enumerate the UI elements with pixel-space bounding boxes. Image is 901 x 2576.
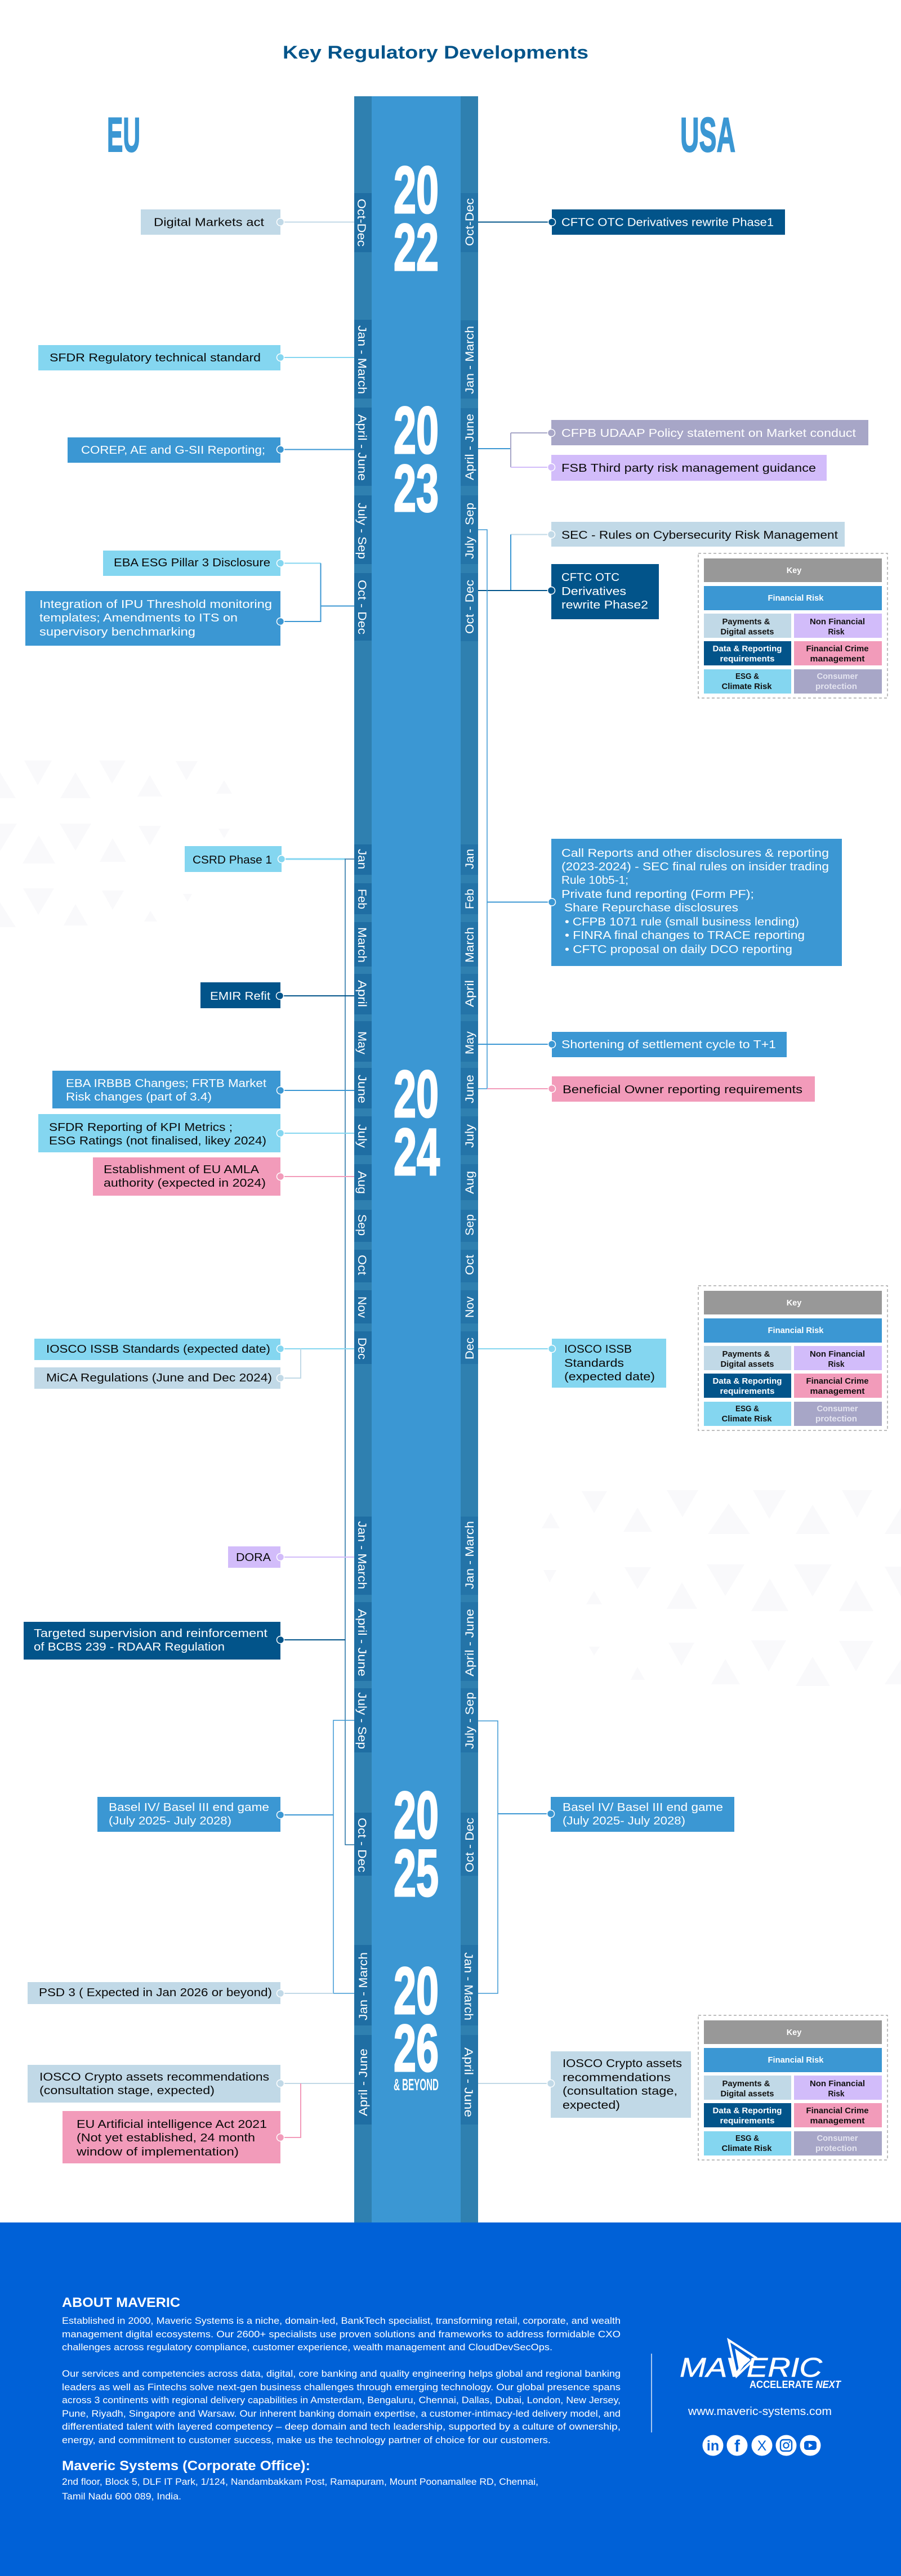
legend: key 2023: requirements [720,655,775,664]
legend: key 2026: Financial Crime [806,2107,868,2116]
legend: key 2024: Non Financial [810,1350,865,1359]
box: IOSCO Crypto assets right: IOSCO Crypto assets [563,2057,682,2070]
year 2023: 20 [394,393,439,468]
box: IOSCO ISSB Standards left [34,1339,280,1360]
box: Targeted supervision: of BCBS 239 - RDAAR Regulation [34,1640,225,1653]
legend: key 2024: Financial Risk [768,1326,824,1335]
box: Call Reports [551,839,842,966]
box: Beneficial Owner reporting [552,1076,815,1102]
box: Integration of IPU Threshold [25,591,280,646]
year 2026 and beyond: 26 [394,2011,439,2086]
box: EBA ESG Pillar 3 Disclosure: EBA ESG Pillar 3 Disclosure [114,556,270,569]
right month labels: Oct-Dec [463,198,476,246]
heading: corporate office: Maveric Systems (Corporate Office): [62,2458,310,2474]
left month labels: July - Sep [355,1692,368,1749]
box: Basel IV left: Basel IV/ Basel III end game [109,1801,269,1814]
box: Integration of IPU Threshold: templates; Amendments to ITS on [39,611,238,624]
box: Establishment of EU AMLA authority [93,1157,280,1196]
legend: key 2024: Financial Crime [806,1377,868,1386]
right month labels: April - June [463,414,476,480]
right month labels: Dec [463,1338,476,1359]
right month labels: June [463,1075,476,1103]
box: IOSCO Crypto assets right [551,2051,691,2118]
legend: key 2023: management [810,655,865,664]
legend: key 2026: Digital assets [721,2090,774,2099]
box: Establishment of EU AMLA authority: Establishment of EU AMLA [104,1163,259,1176]
icon: X [751,2435,773,2456]
right month labels: July - Sep [463,1692,476,1749]
right month labels: July - Sep [463,503,476,559]
text block: about paragraph 2: energy, and commitment to customer success, make us the technology partner of choice for our customers. [62,2435,551,2445]
icon: YouTube [800,2435,821,2456]
box: SEC Rules on Cybersecurity [551,522,845,547]
box: CSRD Phase 1: CSRD Phase 1 [193,853,272,866]
connector: AMLA [277,1173,354,1180]
text block: about paragraph 2: leaders as well as Fintechs solve next-gen business challenges through emerging technology. Our global presence spans [62,2382,621,2392]
legend: key 2024: ESG & [735,1405,759,1414]
year 2025: 25 [394,1836,439,1911]
year 2024: 24 [394,1115,440,1189]
left month labels: Oct - Dec [355,1818,368,1872]
title: Key Regulatory Developments [283,42,588,62]
box: Call Reports: • CFPB 1071 rule (small business lending) [565,915,799,928]
box: CFTC OTC Derivatives rewrite Phase2: Derivatives [561,585,626,598]
logo: Maveric: ACCELERATE NEXT [750,2379,842,2390]
logo: Maveric: MAVERIC [680,2353,822,2383]
box: PSD 3: PSD 3 ( Expected in Jan 2026 or beyond) [39,1986,272,1999]
text block: about paragraph 1: management digital ecosystems. Our 2600+ specialists use proven solutions and frameworks to address formidable CXO [62,2329,621,2340]
text block: about paragraph 2: differentiated talent with layered competency – deep domain and tech leadership, supported by a culture of ownership, [62,2421,621,2432]
box: Call Reports: Private fund reporting (Form PF); [561,888,754,901]
heading: About Maveric: ABOUT MAVERIC [62,2295,180,2310]
left month labels: Dec [355,1338,368,1359]
connector: IOSCO ISSB right [478,1345,555,1352]
box: Call Reports: (2023-2024) - SEC final rules on insider trading [561,860,829,873]
connector: COREP [277,446,354,453]
year 2024: 20 [394,1057,439,1132]
box: SEC Rules on Cybersecurity: SEC - Rules on Cybersecurity Risk Management [561,529,838,542]
legend: key 2026: Payments & [722,2079,770,2088]
legend: key 2026: requirements [720,2117,775,2126]
connector: EMIR Refit [276,992,354,1000]
box: IOSCO ISSB Standards right [552,1339,666,1388]
connector: Basel right [478,1721,554,1993]
box: FSB Third party: FSB Third party risk management guidance [561,462,816,475]
website: www.maveric-systems.com [688,2405,832,2418]
left month labels: March [355,927,368,963]
box: CSRD Phase 1 [185,846,282,872]
left month labels: Jan - March [355,1521,368,1589]
legend: key 2023: protection [815,682,857,691]
icon: Instagram [776,2435,796,2456]
connector: DORA [277,1554,354,1560]
left month labels: July - Sep [355,503,368,559]
box: IOSCO Crypto assets right: recommendations [563,2071,671,2084]
divider [651,2354,652,2432]
box: CFTC OTC Derivatives rewrite Phase1 [552,209,785,235]
box: Establishment of EU AMLA authority: authority (expected in 2024) [104,1177,266,1189]
left month labels [355,199,370,2116]
text block: about paragraph 2: Pune, Riyadh, Singapore and Warsaw. Our inherent banking domain expertise, a customer-intimacy-led delivery model, and [62,2408,621,2419]
box: COREP: COREP, AE and G-SII Reporting; [81,444,265,457]
right month labels: March [463,927,476,963]
right month labels: Nov [463,1296,476,1318]
connector: IOSCO Crypto right [478,2079,554,2087]
logo: Maveric [680,2340,842,2390]
box: EMIR Refit [200,982,280,1008]
box: MiCA Regulations: MiCA Regulations (June and Dec 2024) [46,1371,272,1384]
box: EU Artificial intelligence Act [63,2111,280,2163]
left month labels: Jan - March [357,1952,370,2020]
text block: address [62,2476,538,2502]
box: Digital Markets act: Digital Markets act [154,216,264,229]
left month labels: April - June [357,2049,370,2116]
legend: key 2026: Risk [828,2090,845,2099]
legend: key 2026 [698,2015,887,2160]
year 2026 and beyond [394,1954,439,2094]
box: EU Artificial intelligence Act: (Not yet established, 24 month [77,2131,255,2144]
box: Call Reports: • FINRA final changes to TRACE reporting [565,929,805,942]
box: IOSCO Crypto assets right: expected) [563,2099,620,2112]
connector: 2023 July-Sep to Call Reports and 2024 items [478,530,555,1092]
year 2023: 23 [394,451,439,526]
right month labels: Oct - Dec [463,580,476,634]
legend: key 2026: Consumer [817,2134,858,2143]
box: PSD 3 [28,1982,280,2004]
connector: Basel left and PSD 3 [277,1720,354,1997]
box: CFTC OTC Derivatives rewrite Phase2: rewrite Phase2 [561,598,648,611]
icon: LinkedIn [703,2435,723,2456]
box: COREP [68,437,280,463]
legend: key 2023: ESG & [735,672,759,681]
left month labels: Aug [355,1171,368,1194]
box: IOSCO Crypto assets left [28,2065,280,2103]
box: IOSCO Crypto assets left: IOSCO Crypto assets recommendations [39,2070,269,2083]
left month labels: July [355,1124,368,1148]
left month labels: April [355,980,368,1007]
legend: key 2023: Data & Reporting [713,645,782,654]
right month labels: July [463,1124,476,1148]
legend: key 2023: Financial Risk [768,594,824,603]
right month labels: Jan [463,849,476,869]
legend: key 2026: Financial Risk [768,2056,824,2065]
right month labels: Aug [463,1171,476,1194]
left month labels: May [355,1031,368,1055]
box: SFDR Regulatory technical standard [38,345,280,370]
legend: key 2026: protection [815,2144,857,2153]
box: DORA: DORA [236,1551,271,1564]
box: CFTC OTC Derivatives rewrite Phase2: CFTC OTC [561,571,619,584]
heading: USA: USA [680,108,735,162]
year 2026 and beyond: 20 [394,1954,439,2028]
connector: Digital Markets act [277,218,354,226]
box: Call Reports: • CFTC proposal on daily DCO reporting [565,943,792,956]
legend: key 2024: protection [815,1415,857,1424]
box: IOSCO ISSB Standards right: IOSCO ISSB [564,1343,632,1356]
legend: key 2026: Data & Reporting [713,2107,782,2116]
legend: key 2023: Financial Crime [806,645,868,654]
legend: key 2026: ESG & [735,2134,759,2143]
year 2026 and beyond: & BEYOND [394,2076,439,2094]
box: IOSCO Crypto assets right: (consultation stage, [563,2085,677,2098]
box: Integration of IPU Threshold: Integration of IPU Threshold monitoring [39,598,272,611]
year 2022: 22 [394,211,439,285]
box: SFDR Reporting of KPI Metrics: ESG Ratings (not finalised, likey 2024) [49,1134,266,1147]
icon: X: X [757,2438,767,2454]
box: Call Reports: Call Reports and other disclosures & reporting [561,847,829,860]
right month labels: April - June [463,1609,476,1676]
box: CFPB UDAAP [551,420,868,445]
connector: EBA ESG and Integration [277,560,354,625]
box: EU Artificial intelligence Act: window of implementation) [76,2145,239,2158]
legend: key 2026: management [810,2117,865,2126]
legend: key 2023: Payments & [722,618,770,627]
right month labels: Sep [463,1214,476,1236]
box: EBA IRBBB Changes: Risk changes (part of 3.4) [66,1090,212,1103]
box: Basel IV left: (July 2025- July 2028) [109,1814,231,1827]
legend: key 2024: Digital assets [721,1360,774,1369]
left month labels: Nov [355,1296,368,1318]
right month labels: Feb [463,889,476,909]
legend: key 2024: Consumer [817,1405,858,1414]
text block: about paragraph 2: across 3 continents with regional delivery capabilities in Amsterdam, Bengaluru, Chennai, Dallas, Dubai, London, New Jersey, [62,2395,621,2405]
left month labels: Oct-Dec [355,199,368,247]
box: IOSCO Crypto assets left: (consultation stage, expected) [39,2084,215,2097]
right month labels: April - June [462,2047,475,2117]
connector: CFTC Phase1 [478,218,555,226]
box: EBA ESG Pillar 3 Disclosure [103,551,280,576]
left month labels: June [355,1075,368,1103]
text block: about paragraph 1 [62,2315,621,2353]
box: Call Reports: Rule 10b5-1; [561,874,628,887]
box: FSB Third party [551,455,827,481]
legend: key 2026: Non Financial [810,2079,865,2088]
left month labels: April - June [355,414,368,481]
legend: key 2023: Climate Risk [722,682,772,691]
left month labels: Sep [355,1214,368,1236]
box: Targeted supervision: Targeted supervision and reinforcement [34,1627,267,1640]
legend: key 2023: Risk [828,628,845,637]
right month labels: Oct - Dec [463,1818,476,1872]
text block: about paragraph 1: Established in 2000, Maveric Systems is a niche, domain-led, BankTech specialist, transforming retail, corporate, and wealth [62,2315,621,2326]
year 2024 [394,1057,440,1189]
right month blocks [461,193,478,2125]
box: SFDR Regulatory technical standard: SFDR Regulatory technical standard [50,351,261,364]
legend: key 2024: Key [787,1299,801,1308]
connector: SFDR Reporting [277,1129,354,1137]
box: Beneficial Owner reporting: Beneficial Owner reporting requirements [563,1083,802,1096]
text block: about paragraph 1: challenges across regulatory compliance, customer experience, wealth management and CloudDevSecOps. [62,2342,552,2353]
right month labels [462,198,476,2117]
text: EU [107,108,140,162]
text block: address: Tamil Nadu 600 089, India. [62,2491,181,2502]
box: DORA [228,1546,280,1568]
panel: footer [0,2222,901,2576]
box: Digital Markets act [141,209,280,235]
box: SFDR Reporting of KPI Metrics: SFDR Reporting of KPI Metrics ; [49,1121,233,1134]
icon: Facebook [726,2435,748,2456]
year 2022: 20 [394,153,439,227]
box: CFPB UDAAP: CFPB UDAAP Policy statement on Market conduct [561,427,856,440]
connector: CFPB and FSB [478,429,555,471]
legend: key 2024: requirements [720,1387,775,1396]
year 2025: 20 [394,1778,439,1853]
connector: IOSCO ISSB and MiCA [277,1345,354,1381]
year 2023 [394,393,439,526]
legend: key 2024: management [810,1387,865,1396]
icon: Facebook: f [734,2437,741,2456]
right month labels: Jan - March [463,1521,476,1589]
right month labels: Jan - March [463,326,476,394]
connector: CSRD and long bracket [278,856,354,1845]
box: Basel IV right: (July 2025- July 2028) [563,1814,685,1827]
legend: key 2023: Consumer [817,672,858,681]
icon: LinkedIn: in [707,2438,719,2454]
box: Shortening of settlement cycle: Shortening of settlement cycle to T+1 [561,1038,776,1051]
right month labels: Jan - March [462,1952,475,2020]
box: EU Artificial intelligence Act: EU Artificial intelligence Act 2021 [77,2118,267,2131]
legend: key 2024: Climate Risk [722,1415,772,1424]
box: IOSCO ISSB Standards left: IOSCO ISSB Standards (expected date) [46,1343,270,1356]
left month labels: Jan - March [355,325,368,394]
box: EBA IRBBB Changes: EBA IRBBB Changes; FRTB Market [66,1077,266,1090]
connector: IOSCO Crypto left and EU AI [277,2079,354,2141]
left month labels: Feb [355,889,368,909]
box: IOSCO ISSB Standards right: (expected date) [564,1370,655,1383]
right month labels: May [463,1031,476,1054]
panel: central timeline [354,96,478,2222]
box: IOSCO ISSB Standards right: Standards [564,1357,624,1370]
box: Basel IV right [551,1797,734,1832]
text block: address: 2nd floor, Block 5, DLF IT Park, 1/124, Nandambakkam Post, Ramapuram, Mount Poonamallee RD, Chennai, [62,2476,538,2487]
box: Call Reports: Share Repurchase disclosures [564,901,738,914]
box: Targeted supervision [24,1622,280,1660]
year 2025 [394,1778,439,1911]
left month labels: Jan [355,849,368,869]
text block: about paragraph 2 [62,2368,621,2445]
box: Integration of IPU Threshold: supervisory benchmarking [39,625,195,638]
box: MiCA Regulations [34,1367,280,1389]
left month labels: Oct [355,1255,368,1275]
legend: key 2024: Data & Reporting [713,1377,782,1386]
left month labels: Oct - Dec [355,580,368,634]
box: EMIR Refit: EMIR Refit [210,990,270,1003]
legend: key 2026: Climate Risk [722,2144,772,2153]
right month labels: April [463,980,476,1007]
connector: EBA IRBBB [277,1086,354,1094]
box: SFDR Reporting of KPI Metrics [38,1114,280,1152]
right month labels: Oct [463,1255,476,1275]
connector: Targeted supervision [277,1636,345,1644]
box: EBA IRBBB Changes [52,1071,280,1108]
box: CFTC OTC Derivatives rewrite Phase1: CFTC OTC Derivatives rewrite Phase1 [561,216,774,229]
connector: SEC and CFTC Phase2 [478,531,555,594]
box: Shortening of settlement cycle [552,1032,787,1057]
legend: key 2023: Digital assets [721,628,774,637]
legend: key 2026: Key [787,2028,801,2037]
connector: SFDR technical standard [277,354,354,361]
legend: key 2024: Payments & [722,1350,770,1359]
legend: key 2024: Risk [828,1360,845,1369]
legend: key 2023: Non Financial [810,618,865,627]
box: Basel IV left [97,1797,280,1832]
legend: key 2024 [698,1286,887,1430]
text block: about paragraph 2: Our services and competencies across data, digital, core banking and quality engineering helps global and regional banking [62,2368,621,2379]
legend: key 2023: Key [787,566,801,575]
box: Basel IV right: Basel IV/ Basel III end game [563,1801,723,1814]
left month blocks [354,193,372,2125]
year 2022 [394,153,439,285]
left month labels: April - June [355,1609,368,1676]
legend: key 2023 [698,553,887,698]
box: CFTC OTC Derivatives rewrite Phase2 [551,564,659,619]
